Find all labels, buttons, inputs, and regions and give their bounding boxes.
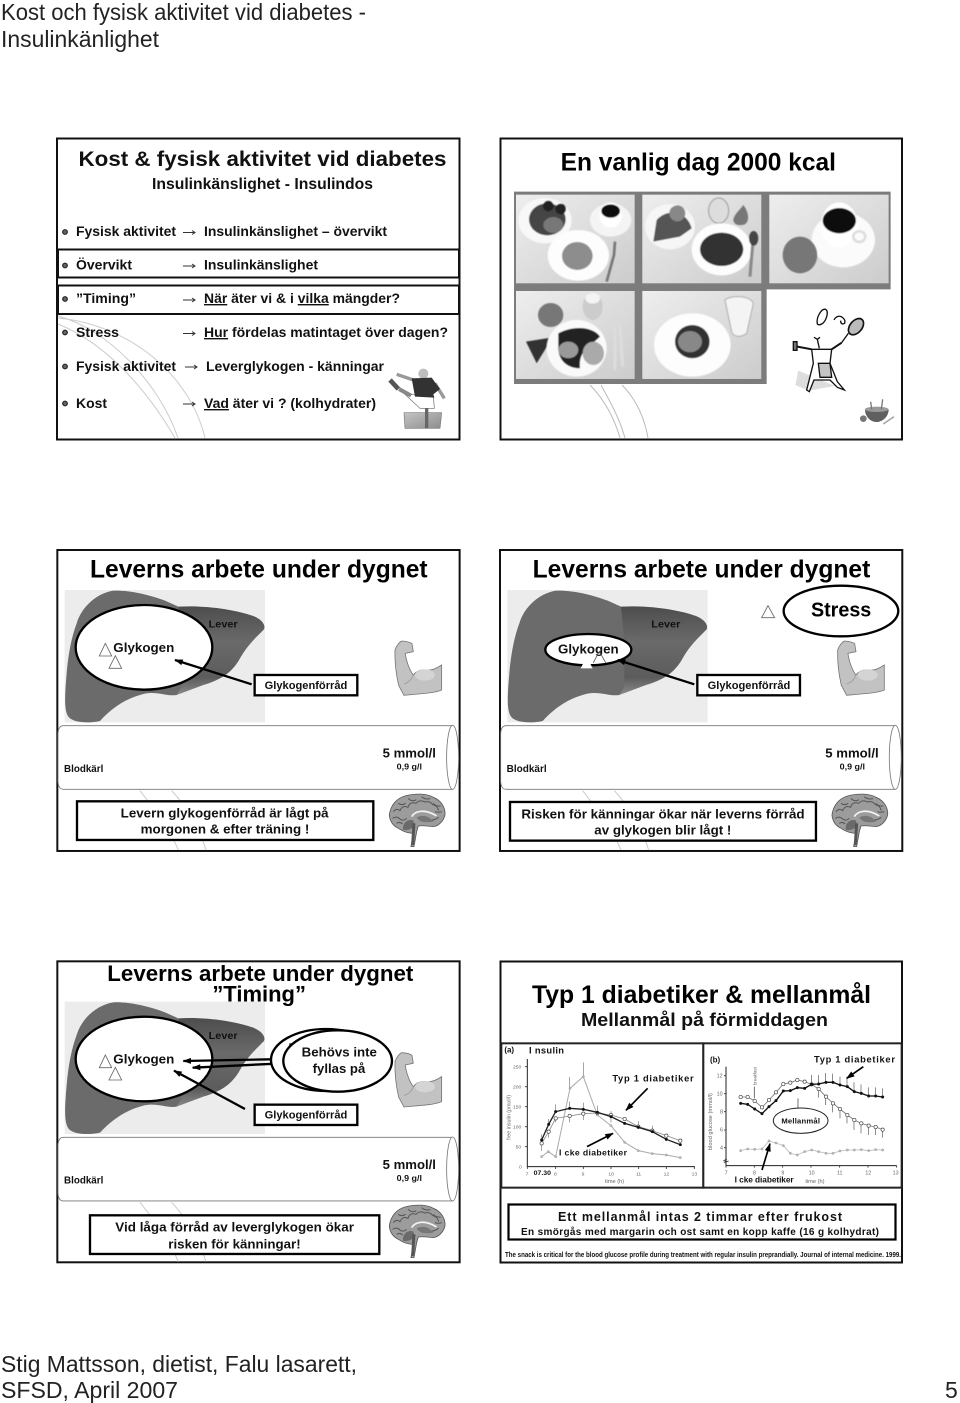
callout: [90, 1215, 379, 1254]
value: 0,9 g/l: 0,9 g/l: [397, 1174, 422, 1183]
box label: Glykogenförråd: [265, 1110, 347, 1122]
label: behövs inte fyllas på: [302, 1045, 377, 1076]
blood vessel: [501, 725, 901, 789]
heading: Leverns arbete under dygnet: [107, 961, 414, 986]
axis labels: 7: [725, 1170, 728, 1176]
heading: Kost & fysisk aktivitet vid diabetes: [78, 147, 447, 171]
list rows: När äter vi & i vilka mängder?: [204, 290, 400, 306]
callout: risken för känningar!: [168, 1236, 301, 1251]
panel: leverns arbete, timing: [57, 961, 460, 1262]
meal 2: [645, 204, 695, 249]
chart: insulin: [501, 1043, 703, 1188]
axis labels: 200: [513, 1084, 522, 1090]
axis labels: 6: [720, 1128, 723, 1134]
arrow to glycogen: [618, 660, 694, 684]
label: blodkärl: Blodkärl: [64, 1176, 104, 1187]
blood vessel: [58, 725, 459, 789]
box: glykogenförråd: [255, 675, 357, 695]
list rows: Insulinkänslighet: [204, 256, 318, 272]
icon: bowl: [860, 399, 894, 424]
label: behövs inte fyllas på: Behövs inte: [302, 1045, 377, 1060]
value: 0,9 g/l: 0,9 g/l: [397, 762, 422, 771]
axis labels: [708, 1066, 899, 1185]
partly hidden text fragment: [289, 1043, 294, 1050]
list rows: Stress: [76, 324, 119, 340]
callout: [508, 1204, 896, 1240]
axis labels: 10: [608, 1172, 614, 1178]
list rows: [76, 223, 448, 411]
footer: Stig Mattsson, dietist, Falu lasarett,: [1, 1351, 357, 1377]
panel: leverns arbete, stress: [500, 550, 902, 851]
list rows: Övervikt: [76, 256, 132, 272]
panel: kost och fysisk aktivitet: [57, 138, 460, 440]
arrow pair from ellipses: [183, 1059, 283, 1068]
axis labels: 10: [809, 1170, 815, 1176]
panel: leverns arbete, glykogen: [57, 550, 460, 851]
heading: Leverns arbete under dygnet: [533, 556, 870, 583]
stress ellipse: [784, 586, 898, 636]
label: behövs inte fyllas på: fyllas på: [313, 1061, 366, 1076]
glycogen ellipse: [76, 605, 212, 690]
axis labels: 0: [519, 1164, 522, 1170]
callout: Ett mellanmål intas 2 timmar efter frukost: [558, 1210, 843, 1224]
axis labels: 8: [753, 1170, 756, 1176]
callout: En smörgås med margarin och ost samt en kopp kaffe (16 g kolhydrat): [521, 1226, 879, 1238]
stress triangle: [762, 606, 775, 618]
source note: The snack is critical for the blood glucose profile during treatment with regular insulin preprandially. Journal of internal medicine. 1999.: [505, 1252, 901, 1259]
box: glykogenförråd: [255, 1105, 357, 1125]
axis labels: blood glucose (mmol/l): [708, 1093, 714, 1150]
bullets: [63, 230, 67, 406]
list rows: Fysisk aktivitet: [76, 223, 176, 239]
arrow to glycogen: [174, 1071, 245, 1109]
chart: insulin: (a): [504, 1045, 514, 1054]
axis labels: 100: [513, 1124, 522, 1130]
callout: Risken för känningar ökar när leverns förråd: [521, 806, 805, 821]
glycogen ellipse: [76, 1017, 212, 1101]
back ellipse: [271, 1029, 381, 1091]
panel: en vanlig dag: [500, 138, 902, 440]
food photo grid: [514, 192, 891, 384]
list rows: Kost: [76, 395, 107, 411]
callout: av glykogen blir lågt !: [594, 823, 731, 838]
callout: [510, 802, 816, 841]
axis labels: 13: [692, 1172, 697, 1178]
axis labels: 50: [516, 1144, 521, 1150]
chart: blood glucose: Mellanmål: [781, 1116, 820, 1125]
label: blodkärl: Blodkärl: [507, 764, 547, 775]
liver: [65, 590, 265, 722]
list rows: Hur fördelas matintaget över dagen?: [204, 324, 448, 340]
axis labels: 11: [837, 1170, 843, 1176]
arrow to glycogen: [175, 660, 252, 684]
axis labels: 13: [893, 1170, 899, 1176]
arrows: [183, 230, 197, 406]
axis labels: 250: [513, 1064, 522, 1070]
triangles: [99, 1055, 122, 1080]
axis labels: 8: [554, 1172, 557, 1178]
axis labels: 12: [664, 1172, 669, 1178]
liver: [507, 590, 708, 722]
list rows: Fysisk aktivitet: [76, 358, 176, 374]
axis labels: [506, 1064, 697, 1185]
label: glykogen: Glykogen: [113, 1052, 174, 1067]
footer: [1, 1351, 958, 1403]
chart: blood glucose: (b): [710, 1055, 721, 1064]
heading: En vanlig dag 2000 kcal: [561, 150, 836, 177]
icon: juggling chef: [793, 309, 867, 392]
page title: Insulinkänlighet: [1, 26, 160, 52]
label: lever: Lever: [209, 1031, 238, 1042]
callout: Levern glykogenförråd är lågt på: [121, 806, 329, 821]
icon: brain: [389, 794, 445, 847]
meal 5: [654, 313, 731, 377]
meal 3: [812, 213, 875, 267]
chart: blood glucose: Typ 1 diabetiker: [814, 1054, 895, 1064]
callout: [77, 801, 373, 840]
icon: muscle: [395, 641, 442, 695]
list rows: Leverglykogen - känningar: [206, 358, 385, 374]
callout: morgonen & efter träning !: [141, 822, 309, 837]
list rows: ”Timing”: [76, 290, 136, 306]
axis labels: 12: [717, 1073, 723, 1079]
blood vessel: [58, 1137, 459, 1201]
value: 5 mmol/l: 5 mmol/l: [825, 746, 879, 760]
subheading: Mellanmål på förmiddagen: [581, 1009, 828, 1030]
value: 5 mmol/l: 5 mmol/l: [383, 746, 436, 760]
icon: brain: [389, 1205, 445, 1258]
box label: Glykogenförråd: [265, 680, 347, 692]
axis labels: breakfast: [753, 1066, 758, 1085]
liver: [65, 1002, 265, 1134]
axis labels: 150: [513, 1104, 522, 1110]
axis labels: 9: [781, 1170, 784, 1176]
heading: [107, 961, 414, 1007]
page title: [1, 0, 366, 52]
chart: insulin: I nsulin: [529, 1046, 564, 1056]
callout: Vid låga förråd av leverglykogen ökar: [115, 1220, 354, 1235]
meal 4: [538, 303, 563, 327]
axis labels: 11: [636, 1172, 641, 1178]
icon: muscle: [838, 641, 884, 695]
highlight box: timing: [58, 286, 459, 314]
label: stress: Stress: [811, 600, 871, 622]
label: blodkärl: Blodkärl: [64, 764, 104, 775]
chart: insulin: I cke diabetiker: [559, 1148, 628, 1158]
heading: ”Timing”: [212, 982, 306, 1007]
label: glykogen: Glykogen: [558, 642, 619, 657]
chart: insulin: 07.30: [534, 1170, 551, 1177]
icon: running man: [390, 369, 444, 428]
axis labels: 8: [720, 1109, 723, 1115]
value: 5 mmol/l: 5 mmol/l: [383, 1158, 436, 1172]
box: glykogenförråd: [697, 675, 800, 695]
footer: SFSD, April 2007: [1, 1377, 178, 1403]
panel: typ 1 diabetiker och mellanmål: [500, 962, 902, 1262]
axis labels: time (h): [805, 1179, 825, 1185]
heading: Leverns arbete under dygnet: [90, 556, 428, 583]
highlight box: övervikt: [58, 250, 459, 278]
axis labels: 7: [526, 1172, 529, 1178]
value: 0,9 g/l: 0,9 g/l: [840, 762, 865, 771]
subheading: Insulinkänslighet - Insulindos: [152, 176, 373, 193]
triangles: [581, 657, 593, 668]
label: lever: Lever: [651, 619, 680, 630]
triangles: [99, 643, 122, 668]
axis labels: 9: [582, 1172, 585, 1178]
axis labels: 4: [720, 1145, 723, 1151]
axis labels: free insulin (pmol/l): [506, 1095, 512, 1140]
list rows: Vad äter vi ? (kolhydrater): [204, 395, 376, 411]
footer: 5: [945, 1377, 958, 1403]
axis labels: 10: [717, 1091, 723, 1097]
chart: blood glucose: [703, 1043, 902, 1188]
axis labels: 12: [865, 1170, 871, 1176]
icon: brain: [832, 794, 888, 847]
label: lever: Lever: [209, 619, 238, 630]
chart: insulin: Typ 1 diabetiker: [612, 1073, 694, 1083]
axis labels: time (h): [605, 1179, 624, 1185]
front ellipse: [283, 1030, 392, 1092]
list rows: Insulinkänslighet – övervikt: [204, 223, 387, 239]
icon: muscle: [395, 1053, 442, 1107]
heading: Typ 1 diabetiker & mellanmål: [532, 982, 871, 1009]
glycogen ellipse: [545, 634, 631, 665]
box label: Glykogenförråd: [708, 680, 790, 692]
meal 1: [518, 198, 572, 243]
chart: blood glucose: I cke diabetiker: [735, 1175, 794, 1185]
label: glykogen: Glykogen: [113, 640, 174, 655]
